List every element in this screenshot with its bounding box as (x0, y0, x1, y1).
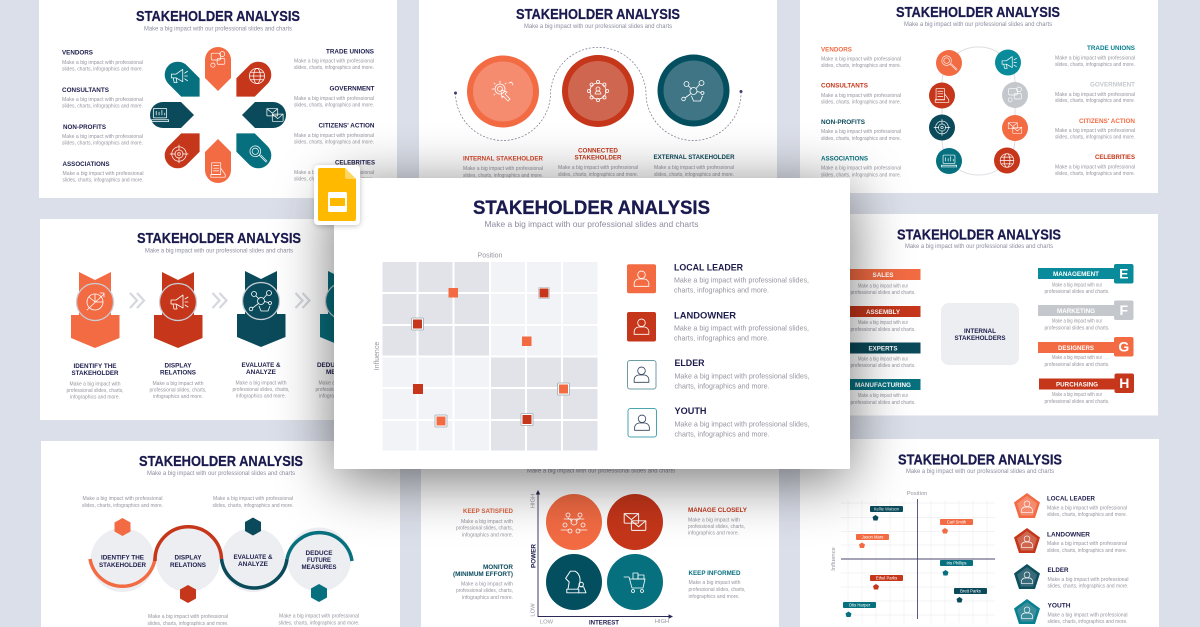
matrix markers (412, 288, 570, 427)
axis labels: LOW (530, 603, 536, 617)
label: purchasing H: PURCHASING (1056, 381, 1098, 388)
circle: internal stakeholder (467, 56, 539, 128)
text: consultants: Make a big impact with professional (821, 93, 901, 99)
text: citizens action (294, 122, 375, 146)
text: local leader (674, 262, 809, 294)
label: purchasing H: Make a big impact with our (1052, 392, 1102, 398)
text: vendors: slides, charts, infographics and more. (821, 63, 901, 69)
text: local leader: LOCAL LEADER (674, 262, 743, 273)
text: elder: slides, charts, infographics and more. (1048, 584, 1129, 590)
text: identify: Make a big impact with (70, 382, 120, 388)
text: landowner: Make a big impact with professional slides, (674, 324, 809, 333)
text: citizens action: slides, charts, infographics and more. (294, 140, 374, 146)
chevrons 2 (212, 293, 226, 308)
text: celebrities: CELEBRITIES (335, 159, 375, 166)
text: evaluate: ANALYZE (246, 369, 276, 376)
text: non-profits: NON-PROFITS (63, 124, 106, 131)
text: youth: Make a big impact with professional slides, (674, 420, 810, 429)
label: experts: professional slides and charts. (850, 363, 916, 369)
subtitle: Make a big impact with our professional slides and charts (906, 468, 1054, 475)
subtitle: Make a big impact with our professional slides and charts (524, 23, 672, 30)
step labels: IDENTIFY THE (101, 554, 144, 562)
text: elder (1048, 567, 1129, 590)
axis labels: HIGH (655, 619, 669, 625)
label: management E: professional slides and charts. (1044, 289, 1110, 295)
label: purchasing H (1039, 374, 1134, 405)
icon: youth (628, 408, 656, 437)
step labels: ANALYZE (238, 561, 268, 568)
text: evaluate: Make a big impact with (236, 380, 286, 386)
dashed connector path (456, 47, 741, 140)
text: local leader: charts, infographics and more. (674, 286, 769, 294)
text: citizens action: Make a big impact with professional (1055, 128, 1135, 134)
label: manufacturing: MANUFACTURING (855, 382, 911, 389)
label: marketing F: professional slides and charts. (1044, 326, 1110, 332)
text: associations: Make a big impact with professional (821, 166, 901, 172)
text: associations: slides, charts, infographics and more. (62, 178, 144, 184)
label: management E (1038, 264, 1134, 295)
icon: elder (628, 360, 656, 389)
circle: external stakeholder (658, 54, 730, 126)
marker: mars (856, 534, 889, 548)
text: citizens action: CITIZENS' ACTION (318, 122, 375, 129)
text: external stakeholder: Make a big impact with professional (654, 165, 734, 171)
panel: main stakeholder matrix card (334, 178, 850, 469)
text: youth: YOUTH (1048, 602, 1071, 609)
text: associations (821, 155, 901, 178)
text: vendors: Make a big impact with professional (62, 60, 143, 66)
text: keep informed: infographics and more. (688, 594, 740, 600)
marker: smith (940, 519, 973, 534)
text: internal stakeholder (463, 155, 543, 179)
circles with icons (929, 50, 1028, 174)
text: celebrities: slides, charts, infographics and more. (1055, 171, 1135, 177)
text: non-profits: slides, charts, infographics and more. (821, 136, 901, 142)
petal wheel diagram (150, 47, 286, 183)
step labels: EVALUATE & (234, 554, 273, 561)
subtitle: Make a big impact with our professional slides and charts (145, 248, 293, 254)
text: connected stakeholder: Make a big impact with professional (558, 165, 638, 171)
text: display: Make a big impact with (152, 381, 204, 387)
text: manage closely (688, 507, 747, 536)
axis labels: HIGH (530, 494, 536, 508)
text: display (150, 362, 207, 400)
text: youth: slides, charts, infographics and more. (1048, 619, 1128, 625)
icon: local leader (627, 264, 656, 293)
label: marketing F: MARKETING (1057, 308, 1095, 315)
text: local leader: Make a big impact with professional slides, (674, 276, 809, 285)
text: monitor: (MINIMUM EFFORT) (453, 571, 513, 578)
label: assembly: professional slides and charts. (850, 327, 916, 333)
text: youth: Make a big impact with professional (1048, 612, 1128, 618)
light circles (90, 528, 351, 592)
text: elder: Make a big impact with professional (1048, 577, 1128, 583)
text: evaluate: professional slides, charts, (232, 387, 290, 393)
text: trade unions: slides, charts, infographics and more. (1055, 62, 1135, 68)
label: sales (845, 269, 920, 296)
subtitle: Make a big impact with our professional slides and charts (904, 21, 1052, 28)
icon: landowner (627, 312, 656, 342)
wave arcs (90, 527, 352, 588)
text: celebrities (1055, 154, 1135, 177)
text: trade unions: slides, charts, infographics and more. (294, 65, 374, 71)
text: keep informed: Make a big impact with (688, 580, 740, 586)
text: vendors (821, 46, 901, 69)
text: associations: ASSOCIATIONS (62, 161, 110, 168)
icon: Google Slides badge (314, 165, 360, 226)
text: youth (674, 406, 810, 438)
text: non-profits: slides, charts, infographics and more. (62, 140, 143, 146)
text: trade unions: TRADE UNIONS (1087, 45, 1135, 52)
caption bottom left: Make a big impact with professional (148, 614, 228, 620)
marker: smith: Carl Smith (947, 520, 967, 525)
text: display: infographics and more. (153, 394, 203, 400)
text: trade unions (294, 48, 374, 71)
text: deduce: DEDUCE FUTURE (317, 362, 371, 369)
label: manufacturing (845, 379, 920, 406)
label: designers G: Make a big impact with our (1052, 355, 1102, 361)
text: citizens action: Make a big impact with professional (294, 133, 374, 139)
title: STAKEHOLDER ANALYSIS (897, 228, 1061, 244)
text: youth: YOUTH (674, 406, 707, 417)
text: vendors: VENDORS (62, 50, 93, 57)
text: monitor: infographics and more. (462, 595, 513, 601)
text: landowner (674, 310, 809, 342)
caption bottom right: slides, charts, infographics and more. (278, 620, 360, 626)
label: assembly (845, 306, 920, 333)
marker: phillips (940, 560, 973, 576)
arrow step 2 (154, 272, 202, 348)
arrow step 1 (71, 272, 120, 348)
text: consultants: slides, charts, infographics and more. (821, 100, 901, 106)
text: connected stakeholder: CONNECTED (578, 147, 618, 154)
text: government: slides, charts, infographics and more. (294, 102, 374, 108)
step labels: DEDUCE (306, 550, 333, 557)
axis label: influence: Influence (374, 342, 381, 370)
text: landowner: LANDOWNER (674, 310, 736, 321)
subtitle: Make a big impact with our professional slides and charts (905, 243, 1053, 250)
text: keep informed: KEEP INFORMED (688, 570, 741, 577)
subtitle: Make a big impact with our professional slides and charts (484, 219, 698, 229)
text: elder (674, 358, 810, 390)
label: sales: professional slides and charts. (850, 290, 916, 296)
label: management E: MANAGEMENT (1053, 271, 1100, 278)
panel: internal stakeholders slide (840, 214, 1158, 416)
label: manufacturing: Make a big impact with our (858, 393, 908, 399)
step labels: MEASURES (302, 564, 337, 571)
text: external stakeholder (654, 154, 735, 178)
label: designers G (1038, 337, 1134, 368)
subtitle: Make a big impact with our professional slides and charts (147, 470, 295, 477)
text: youth (1048, 602, 1128, 625)
label: manufacturing: professional slides and charts. (850, 400, 916, 406)
panel: petal wheel slide (39, 0, 397, 198)
text: trade unions: TRADE UNIONS (326, 48, 374, 55)
label: marketing F: F (1120, 302, 1129, 318)
grid chart (831, 491, 995, 623)
text: external stakeholder: slides, charts, infographics and more. (654, 172, 734, 178)
step labels: DISPLAY (174, 554, 202, 562)
step labels: FUTURE (307, 557, 331, 564)
text: non-profits: Make a big impact with professional (821, 129, 901, 135)
text: trade unions: Make a big impact with professional (1055, 56, 1135, 62)
text: elder: ELDER (674, 358, 705, 369)
text: deduce: MEASURES (326, 369, 362, 376)
icon: dots at path ends (454, 90, 742, 94)
text: keep satisfied (456, 508, 513, 538)
title: STAKEHOLDER ANALYSIS (139, 454, 303, 470)
text: government: GOVERNMENT (330, 85, 375, 92)
label: management E: E (1119, 266, 1128, 282)
text: vendors: slides, charts, infographics and more. (62, 66, 143, 72)
label: purchasing H: professional slides and charts. (1044, 399, 1110, 405)
text: government: Make a big impact with professional (294, 96, 374, 102)
text: government: Make a big impact with professional (1055, 92, 1135, 98)
label: designers G: professional slides and charts. (1044, 362, 1110, 368)
step labels: STAKEHOLDER (99, 562, 146, 569)
label: experts: EXPERTS (868, 345, 898, 352)
marker: mars: Jason Mars (862, 535, 883, 540)
text: identify (66, 363, 124, 400)
chevrons 1 (130, 293, 144, 308)
arrow step 4 (320, 271, 368, 347)
axis label: position: Position (478, 252, 503, 260)
text: display: RELATIONS (160, 370, 196, 376)
text: deduce: professional slides, charts, (316, 387, 373, 393)
text: local leader: Make a big impact with professional (1047, 506, 1127, 512)
panel: position influence map slide (800, 439, 1159, 627)
quadrant circles (546, 494, 663, 610)
text: elder: charts, infographics and more. (674, 382, 770, 390)
text: associations (62, 161, 144, 184)
step labels: RELATIONS (170, 562, 206, 569)
text: evaluate: infographics and more. (236, 394, 286, 400)
text: consultants: CONSULTANTS (62, 87, 109, 94)
pentagon: landowner (1014, 528, 1040, 553)
label: marketing F: Make a big impact with our (1052, 318, 1102, 324)
text: citizens action: CITIZENS' ACTION (1079, 118, 1135, 125)
caption top left (82, 496, 163, 509)
title: STAKEHOLDER ANALYSIS (898, 452, 1062, 468)
text: keep satisfied: KEEP SATISFIED (463, 508, 513, 515)
pentagon: elder (1014, 564, 1040, 589)
text: consultants: CONSULTANTS (821, 82, 868, 89)
text: local leader (1047, 495, 1127, 518)
panel: power interest matrix slide (421, 460, 779, 627)
text: landowner: Make a big impact with professional (1047, 541, 1127, 547)
text: internal stakeholder: Make a big impact with professional (463, 166, 543, 172)
text: government (294, 85, 375, 108)
text: associations: Make a big impact with professional (62, 171, 144, 177)
marker: watson (870, 506, 903, 520)
arrow step 3 (237, 271, 286, 347)
text: display: DISPLAY (164, 362, 192, 370)
caption bottom left (148, 614, 229, 627)
grid chart: Position (907, 491, 927, 497)
text: deduce: Make a big impact with (318, 380, 370, 386)
text: manage closely: Make a big impact with (688, 518, 740, 524)
text: youth: charts, infographics and more. (674, 430, 770, 438)
axis labels: LOW (540, 620, 554, 626)
ring behind circles (942, 47, 1015, 175)
text: keep informed (688, 570, 746, 600)
text: non-profits: NON-PROFITS (821, 119, 865, 126)
text: connected stakeholder: slides, charts, infographics and more. (558, 172, 638, 178)
text: keep satisfied: professional slides, charts, (456, 526, 513, 532)
text: identify: infographics and more. (70, 394, 120, 400)
text: elder: ELDER (1048, 567, 1069, 574)
label: assembly: Make a big impact with our (858, 320, 908, 326)
text: monitor (453, 564, 513, 601)
text: associations: ASSOCIATIONS (821, 155, 868, 162)
axis labels: POWER (530, 544, 538, 568)
caption bottom right: Make a big impact with professional (279, 614, 359, 620)
center box: internal stakeholders: INTERNAL (964, 328, 996, 335)
text: keep informed: professional slides, charts, (688, 587, 746, 593)
main card shadow (334, 188, 850, 480)
label: designers G: G (1118, 339, 1129, 355)
label: marketing F (1038, 300, 1134, 332)
title: STAKEHOLDER ANALYSIS (137, 231, 301, 247)
marker: ethel (870, 575, 903, 590)
text: evaluate: EVALUATE & (242, 362, 281, 369)
text: elder: Make a big impact with professional slides, (674, 372, 810, 381)
text: internal stakeholder: INTERNAL STAKEHOLDER (463, 155, 543, 162)
text: celebrities: Make a big impact with professional (294, 170, 374, 176)
text: monitor: Make a big impact with (461, 582, 513, 588)
label: sales: Make a big impact with our (858, 284, 908, 290)
text: celebrities (294, 159, 375, 182)
title: STAKEHOLDER ANALYSIS (516, 7, 680, 23)
text: internal stakeholder: slides, charts, infographics and more. (463, 173, 543, 179)
caption top right: Make a big impact with professional (213, 496, 293, 502)
text: consultants (821, 82, 901, 106)
label: management E: Make a big impact with our (1052, 282, 1102, 288)
circle: connected stakeholder (562, 55, 634, 127)
panel: ring of circles slide (800, 0, 1158, 193)
text: non-profits (821, 119, 901, 142)
text: trade unions (1055, 45, 1135, 68)
panel: wave circles slide (41, 441, 400, 627)
text: keep satisfied: infographics and more. (462, 532, 513, 538)
text: landowner: charts, infographics and more. (674, 334, 769, 342)
text: celebrities: Make a big impact with professional (1055, 164, 1135, 170)
marker: brett (954, 588, 987, 602)
text: consultants: slides, charts, infographics and more. (62, 104, 143, 110)
title: STAKEHOLDER ANALYSIS (896, 5, 1060, 21)
text: vendors: Make a big impact with professional (821, 56, 901, 62)
text: landowner: LANDOWNER (1047, 531, 1090, 538)
panel: process arrows slide (40, 219, 373, 420)
marker: phillips: Iris Phillips (946, 561, 967, 566)
text: connected stakeholder (558, 147, 638, 178)
caption bottom right (278, 614, 360, 626)
text: celebrities: CELEBRITIES (1095, 154, 1135, 161)
text: landowner: slides, charts, infographics and more. (1047, 548, 1127, 554)
text: manage closely: infographics and more. (688, 530, 739, 536)
marker: watson: Kellie Watson (874, 507, 900, 512)
label: experts: Make a big impact with our (858, 356, 908, 362)
text: non-profits (62, 124, 143, 146)
caption bottom left: slides, charts, infographics and more. (148, 621, 229, 627)
chevrons 3 (296, 293, 310, 308)
text: identify: IDENTIFY THE (74, 363, 117, 370)
caption top right: slides, charts, infographics and more. (212, 503, 294, 509)
text: vendors: VENDORS (821, 46, 852, 54)
caption top right (212, 496, 294, 509)
text: keep satisfied: Make a big impact with (461, 519, 513, 525)
text: local leader: LOCAL LEADER (1047, 495, 1095, 502)
text: consultants: Make a big impact with professional (62, 97, 143, 103)
text: identify: STAKEHOLDER (72, 370, 119, 377)
text: local leader: slides, charts, infographics and more. (1047, 512, 1127, 518)
text: government: GOVERNMENT (1090, 81, 1136, 88)
label: assembly: ASSEMBLY (866, 309, 900, 316)
text: government (1055, 81, 1136, 104)
subtitle: Make a big impact with our professional slides and charts (144, 26, 292, 32)
center box: internal stakeholders (941, 303, 1019, 365)
matrix grid (382, 262, 598, 450)
caption top left: Make a big impact with professional (82, 496, 162, 502)
text: monitor: professional slides, charts, (456, 588, 513, 594)
axis labels (530, 494, 669, 626)
text: deduce: infographics and more. (319, 394, 369, 400)
label: sales: SALES (872, 272, 894, 279)
chart axes (536, 491, 672, 618)
step labels (99, 550, 337, 571)
panel: three circles slide (419, 0, 777, 180)
pentagon: youth (1014, 599, 1040, 624)
text: trade unions: Make a big impact with professional (294, 58, 374, 64)
caption top left: slides, charts, infographics and more. (82, 503, 163, 509)
text: evaluate (232, 362, 290, 400)
text: associations: slides, charts, infographics and more. (821, 172, 901, 178)
text: external stakeholder: EXTERNAL STAKEHOLDER (654, 154, 735, 161)
axis labels: INTEREST (589, 619, 620, 626)
text: monitor: MONITOR (483, 564, 513, 571)
marker: otis: Otis Harper (849, 603, 871, 608)
subtitle: Make a big impact with our professional slides and charts (527, 468, 675, 474)
marker: ethel: Ethel Parks (876, 576, 897, 581)
text: citizens action: slides, charts, infographics and more. (1055, 134, 1135, 140)
text: identify: professional slides, charts, (66, 388, 124, 394)
pentagon: local leader (1014, 493, 1040, 518)
text: citizens action (1055, 118, 1135, 140)
text: non-profits: Make a big impact with professional (62, 134, 143, 140)
label: purchasing H: H (1119, 375, 1129, 391)
marker: otis (843, 602, 876, 617)
marker: brett: Brett Parks (960, 589, 981, 594)
text: celebrities: slides, charts, infographics and more. (294, 176, 374, 182)
text: government: slides, charts, infographics and more. (1055, 98, 1135, 104)
title: STAKEHOLDER ANALYSIS (473, 197, 710, 219)
text: manage closely: professional slides, charts, (688, 524, 745, 530)
text: landowner (1047, 531, 1127, 554)
grid chart: Influence (831, 547, 837, 571)
text: deduce (316, 362, 373, 400)
center box: internal stakeholders: STAKEHOLDERS (954, 335, 1006, 342)
text: display: professional slides, charts, (150, 388, 207, 394)
label: experts (845, 342, 920, 369)
text: vendors (62, 50, 143, 72)
text: manage closely: MANAGE CLOSELY (688, 507, 747, 514)
text: connected stakeholder: STAKEHOLDER (574, 154, 622, 162)
text: consultants (62, 87, 143, 110)
hexagon markers (114, 518, 327, 603)
label: designers G: DESIGNERS (1058, 345, 1094, 352)
title: STAKEHOLDER ANALYSIS (136, 9, 300, 25)
